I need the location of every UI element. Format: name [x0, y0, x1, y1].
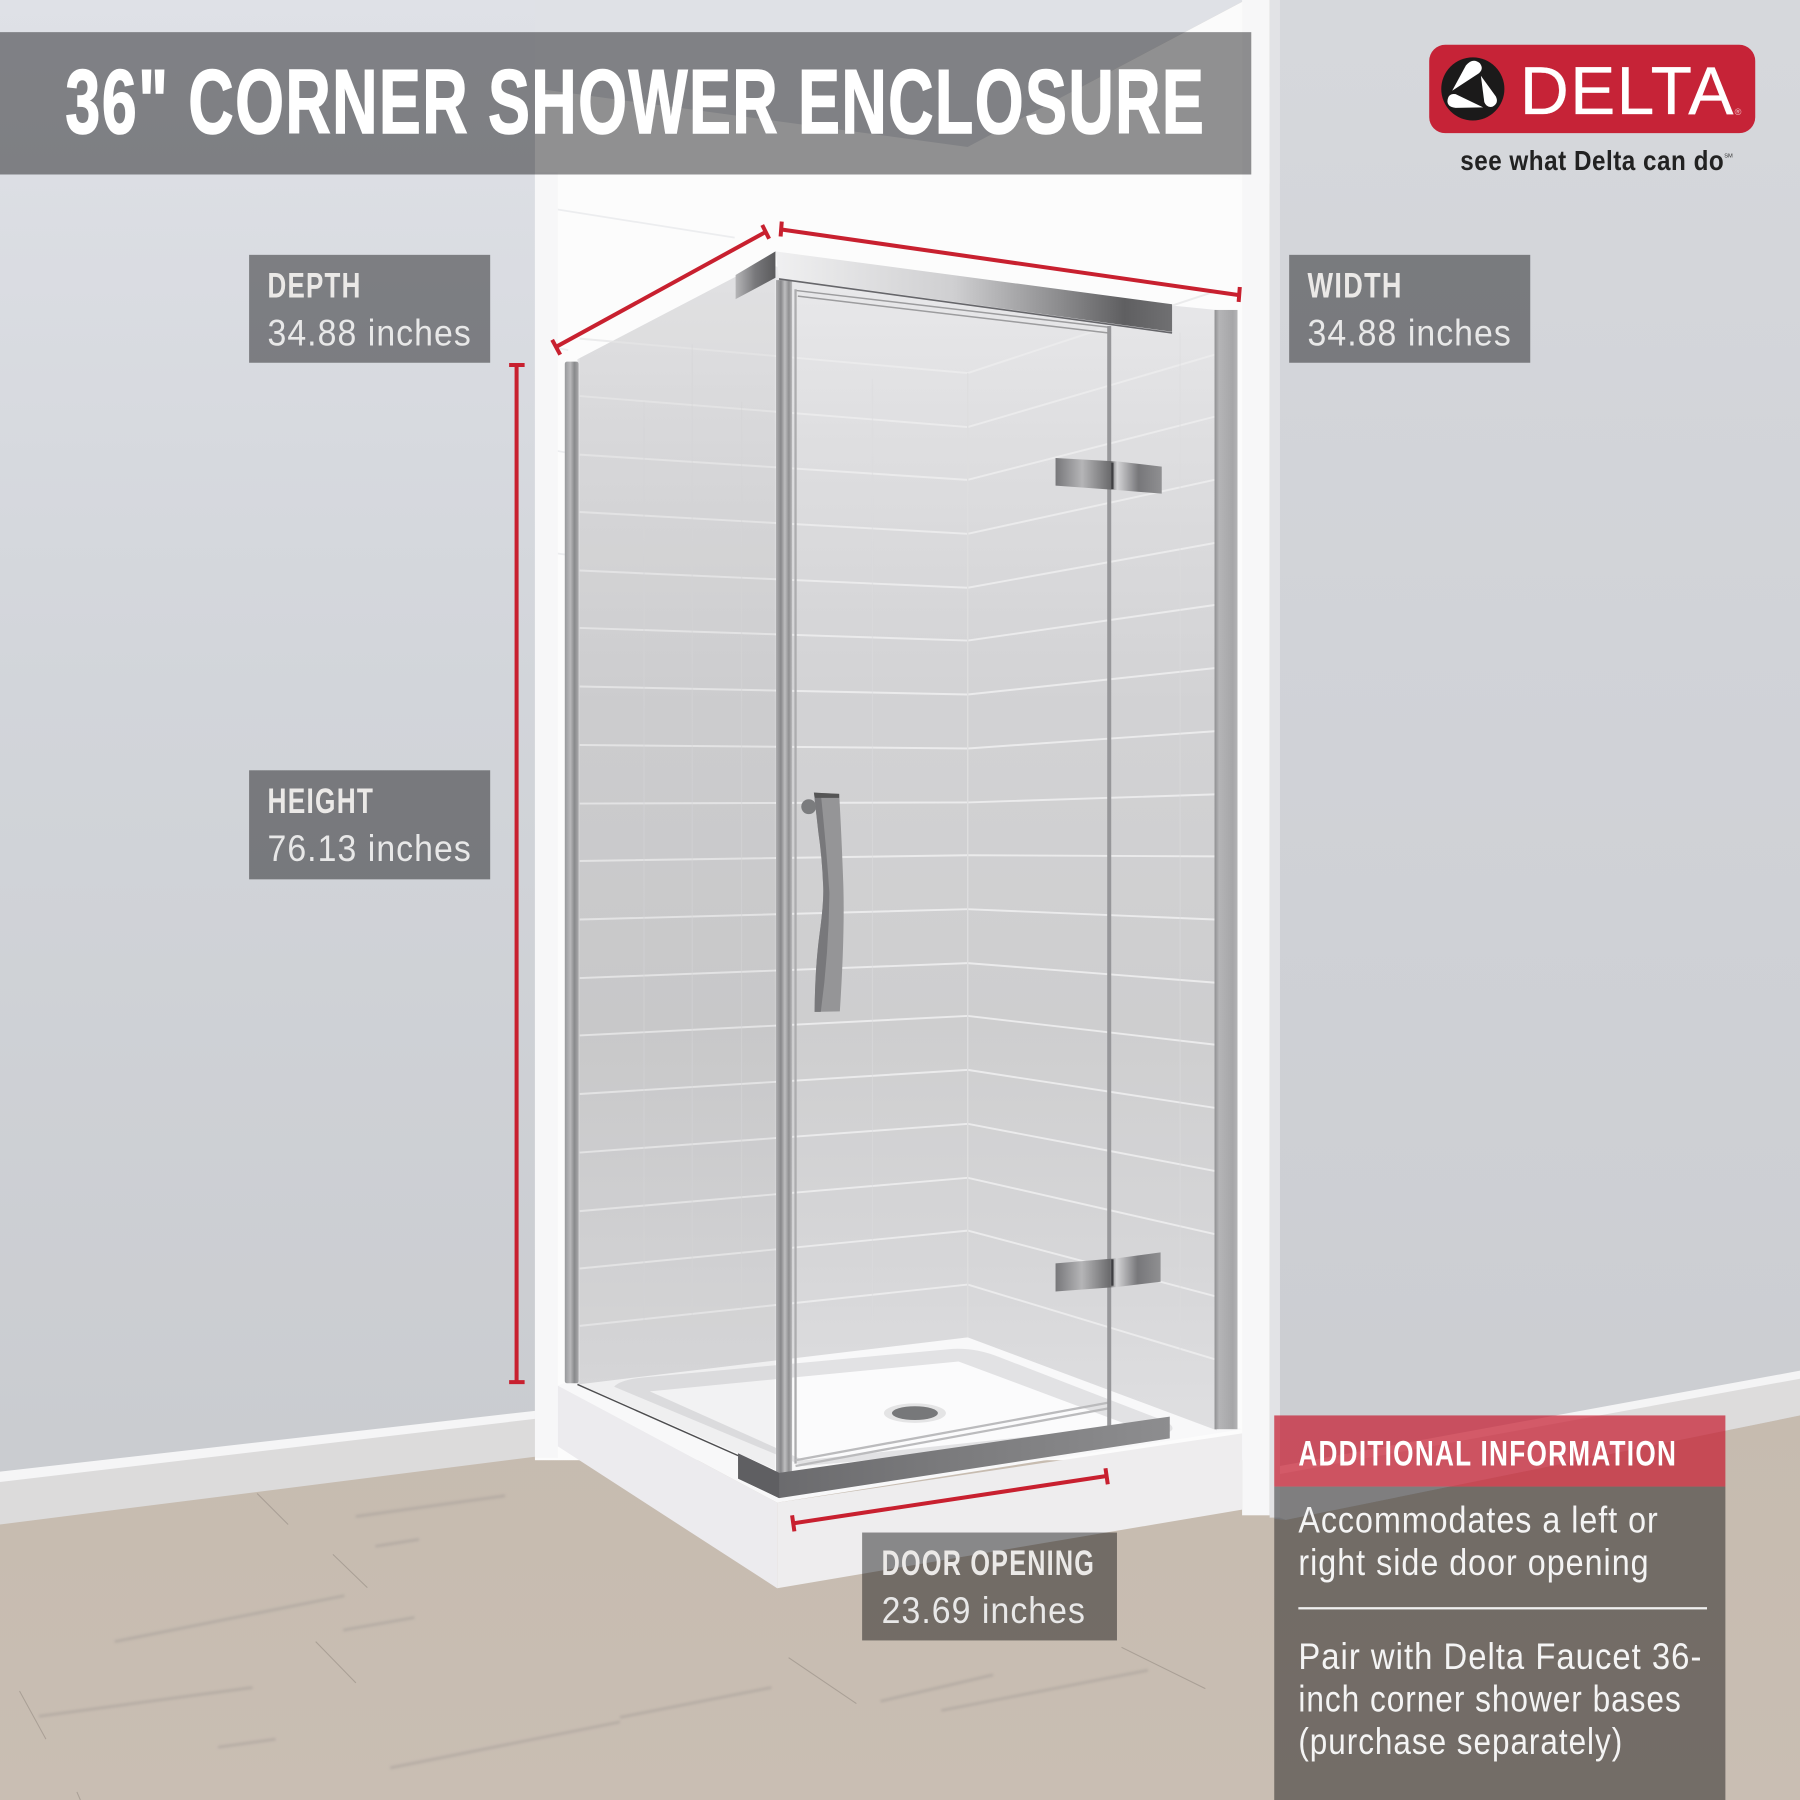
- door opening label: 23.69 inches: [882, 1590, 1086, 1631]
- height label: [249, 770, 490, 879]
- width label: [1289, 255, 1530, 363]
- door hinge edge: [1107, 326, 1111, 1426]
- title: 36" CORNER SHOWER ENCLOSURE: [65, 52, 1205, 153]
- ceiling: [535, 0, 1246, 147]
- door opening label: [862, 1533, 1117, 1640]
- pairing note: inch corner shower bases: [1298, 1679, 1682, 1720]
- door opening dimension line: [792, 1468, 1108, 1531]
- right baseboard: [1280, 1371, 1800, 1520]
- floor: [0, 1415, 1800, 1800]
- tile joints left wall: [580, 339, 968, 1326]
- door handle: [801, 793, 844, 1012]
- lower hinge: [1056, 1252, 1161, 1291]
- left trim: [535, 172, 558, 1458]
- wall corner: [967, 373, 969, 1337]
- depth dimension line: [552, 225, 769, 355]
- logo wordmark: DELTA: [1520, 54, 1734, 129]
- pairing note: (purchase separately): [1298, 1721, 1623, 1762]
- pairing note: Pair with Delta Faucet 36-: [1298, 1636, 1702, 1677]
- panel header: ADDITIONAL INFORMATION: [1298, 1433, 1677, 1473]
- Delta logo: [1429, 45, 1755, 176]
- glass lower edge: [577, 1384, 738, 1456]
- floor plank seams: [20, 1493, 1205, 1800]
- right trim: [1242, 0, 1280, 1518]
- right wall: [1274, 0, 1800, 1527]
- depth label: DEPTH: [267, 265, 362, 305]
- registered mark: ®: [1735, 107, 1742, 117]
- left post: [565, 362, 579, 1383]
- tile joints right wall: [968, 292, 1215, 1359]
- panel body: [1274, 1487, 1725, 1800]
- base front face: [777, 1433, 1242, 1588]
- base left face: [558, 1386, 777, 1588]
- height dimension line: [509, 365, 525, 1382]
- height label: HEIGHT: [267, 781, 374, 821]
- width dimension line: [781, 222, 1240, 302]
- shower enclosure: [565, 251, 1238, 1498]
- depth label: [249, 255, 490, 363]
- top header left: [736, 251, 775, 299]
- floor grain: [39, 1496, 1148, 1768]
- centre post: [776, 280, 792, 1474]
- door opening note: [1298, 1500, 1659, 1583]
- width label: WIDTH: [1308, 265, 1403, 305]
- width label: 34.88 inches: [1308, 313, 1512, 354]
- right post: [1215, 310, 1238, 1429]
- shower base: [558, 1332, 1242, 1588]
- title banner: [0, 32, 1251, 174]
- drain: [884, 1403, 946, 1423]
- height label: 76.13 inches: [267, 828, 472, 869]
- upper hinge: [1056, 458, 1162, 494]
- door opening note: right side door opening: [1298, 1542, 1650, 1583]
- logo emblem: [1441, 57, 1504, 121]
- base top: [558, 1332, 1242, 1503]
- panel header: [1274, 1415, 1725, 1487]
- depth label: 34.88 inches: [267, 313, 472, 354]
- left baseboard: [0, 1411, 535, 1524]
- basin: [614, 1349, 1173, 1466]
- additional information panel: [1274, 1415, 1725, 1800]
- tile surround: [535, 87, 1270, 1460]
- logo badge: [1429, 45, 1755, 133]
- service mark: SM: [1724, 153, 1733, 159]
- surround tile joints: [540, 207, 1257, 554]
- left wall: [0, 0, 540, 1538]
- tagline: see what Delta can do: [1460, 145, 1724, 176]
- door opening note: Accommodates a left or: [1298, 1500, 1659, 1541]
- back walls behind glass: [577, 266, 1217, 1430]
- pairing note: [1298, 1636, 1702, 1762]
- bottom threshold: [738, 1417, 1170, 1498]
- door thin rails: [796, 290, 1108, 333]
- top header front: [775, 251, 1172, 332]
- door opening label: DOOR OPENING: [882, 1543, 1095, 1583]
- left glass tint: [580, 272, 775, 1469]
